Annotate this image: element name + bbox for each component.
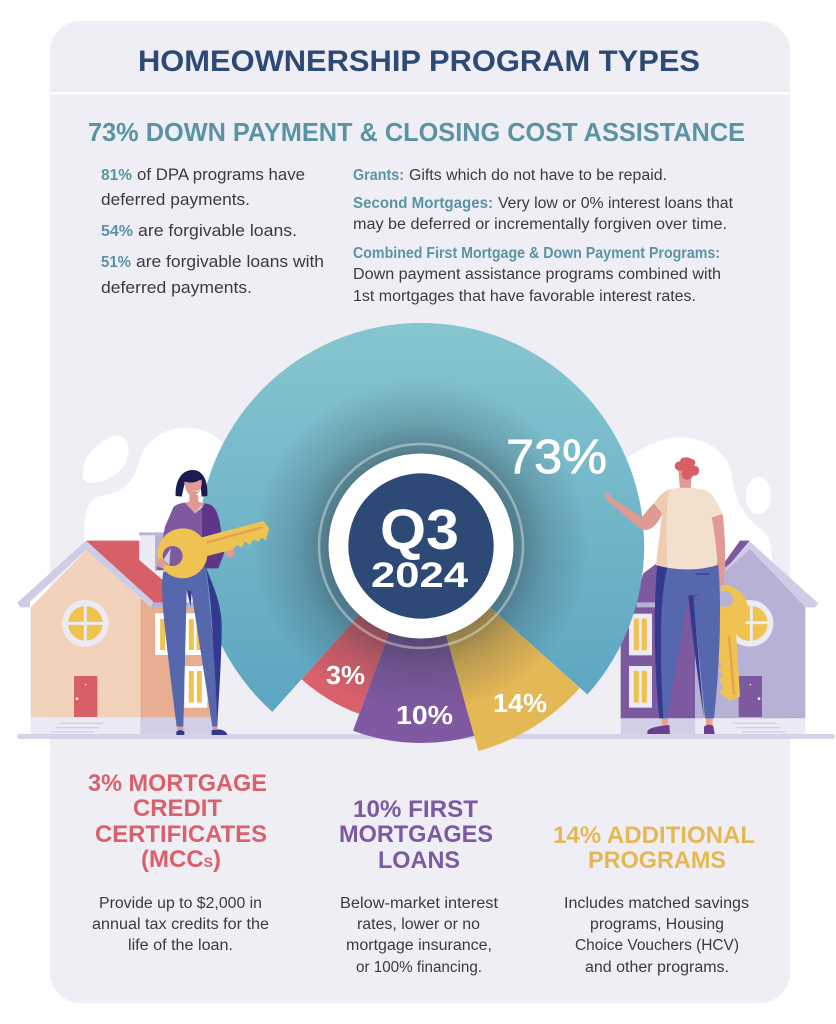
text block: assistance definitions: Combined First Mortgage & Down Payment Programs: bbox=[353, 245, 720, 262]
heading: 10% first mortgages loans: MORTGAGES bbox=[339, 821, 493, 848]
text block: assistance definitions: Down payment assistance programs combined with bbox=[353, 266, 721, 283]
text block: assistance definitions bbox=[353, 167, 734, 305]
heading: 14% additional programs: 14% ADDITIONAL bbox=[553, 822, 755, 849]
text block: DPA statistics: of DPA programs have bbox=[137, 166, 305, 184]
text block: first mortgage description bbox=[340, 895, 499, 976]
value label 10%: 10% bbox=[396, 700, 453, 730]
center badge: Q3 bbox=[380, 498, 459, 562]
text block: assistance definitions: may be deferred or incrementally forgiven over time. bbox=[353, 216, 727, 233]
title: HOMEOWNERSHIP PROGRAM TYPES bbox=[138, 45, 700, 78]
text block: additional programs description bbox=[564, 895, 749, 976]
heading: 3% mortgage credit certificates bbox=[88, 770, 267, 873]
text block: DPA statistics: 51% bbox=[101, 254, 131, 271]
wedge: 3% mortgage credit certificates bbox=[302, 546, 421, 714]
text block: additional programs description: Choice Vouchers (HCV) bbox=[575, 937, 739, 954]
text block: first mortgage description: mortgage insurance, bbox=[346, 937, 492, 954]
panel: mortgage credit certificates bbox=[88, 770, 269, 954]
wedge: 10% first mortgages bbox=[353, 546, 474, 743]
text block: DPA statistics: are forgivable loans. bbox=[138, 222, 297, 240]
text block: assistance definitions: Second Mortgages: bbox=[353, 195, 493, 212]
text block: DPA statistics: 54% bbox=[101, 223, 133, 240]
text block: DPA statistics: deferred payments. bbox=[101, 279, 252, 297]
panel: additional programs bbox=[553, 822, 755, 976]
text block: DPA statistics: 81% bbox=[101, 167, 132, 184]
text block: first mortgage description: or 100% financing. bbox=[356, 959, 482, 976]
center badge bbox=[328, 454, 514, 638]
text block: MCC description: annual tax credits for the bbox=[92, 916, 269, 933]
text block: additional programs description: programs, Housing bbox=[590, 916, 724, 933]
illustration: right background blobs bbox=[613, 437, 772, 587]
value label 3%: 3% bbox=[326, 660, 365, 690]
text block: DPA statistics bbox=[101, 166, 324, 297]
value label 73%: 73% bbox=[506, 431, 607, 484]
text block: assistance definitions: Grants: bbox=[353, 167, 404, 184]
value label 14%: 14% bbox=[493, 688, 547, 718]
heading: 10% first mortgages loans: 10% FIRST bbox=[353, 796, 478, 823]
heading: 3% mortgage credit certificates: CREDIT bbox=[133, 795, 222, 822]
text block: first mortgage description: rates, lower or no bbox=[357, 916, 480, 933]
heading: 3% mortgage credit certificates: 3% MORTGAGE bbox=[88, 770, 267, 797]
text block: assistance definitions: Very low or 0% interest loans that bbox=[498, 195, 734, 212]
illustration: left house bbox=[17, 532, 213, 735]
illustration: man holding key bbox=[603, 457, 748, 734]
heading: 10% first mortgages loans bbox=[339, 796, 493, 874]
heading: 14% additional programs bbox=[553, 822, 755, 874]
wedge: 73% down payment assistance bbox=[198, 323, 644, 712]
text block: MCC description: Provide up to $2,000 in bbox=[99, 895, 262, 912]
ground line bbox=[17, 734, 835, 739]
heading: 3% mortgage credit certificates: (MCCS) bbox=[141, 846, 221, 873]
text block: first mortgage description: Below-market interest bbox=[340, 895, 499, 912]
text block: assistance definitions: Gifts which do not have to be repaid. bbox=[409, 167, 667, 184]
illustration: left background blobs bbox=[83, 428, 267, 560]
text block: assistance definitions: 1st mortgages that have favorable interest rates. bbox=[353, 288, 696, 305]
heading: 10% first mortgages loans: LOANS bbox=[378, 847, 460, 874]
wedge: 14% additional programs bbox=[421, 546, 580, 751]
text block: additional programs description: and other programs. bbox=[585, 959, 729, 976]
heading: down payment assistance: 73% DOWN PAYMENT & CLOSING COST ASSISTANCE bbox=[88, 119, 745, 147]
text block: MCC description bbox=[92, 895, 269, 954]
illustration: woman holding key bbox=[157, 470, 269, 735]
center badge: 2024 bbox=[371, 556, 469, 595]
heading: 14% additional programs: PROGRAMS bbox=[588, 847, 726, 874]
text block: MCC description: life of the loan. bbox=[128, 937, 233, 954]
illustration: right house bbox=[621, 541, 818, 735]
text block: DPA statistics: deferred payments. bbox=[101, 191, 250, 209]
text block: DPA statistics: are forgivable loans with bbox=[136, 253, 324, 271]
text block: additional programs description: Includes matched savings bbox=[564, 895, 749, 912]
heading: 3% mortgage credit certificates: CERTIFICATES bbox=[95, 821, 267, 848]
panel: first mortgage loans bbox=[339, 796, 499, 976]
chart: radial share chart bbox=[198, 323, 644, 751]
